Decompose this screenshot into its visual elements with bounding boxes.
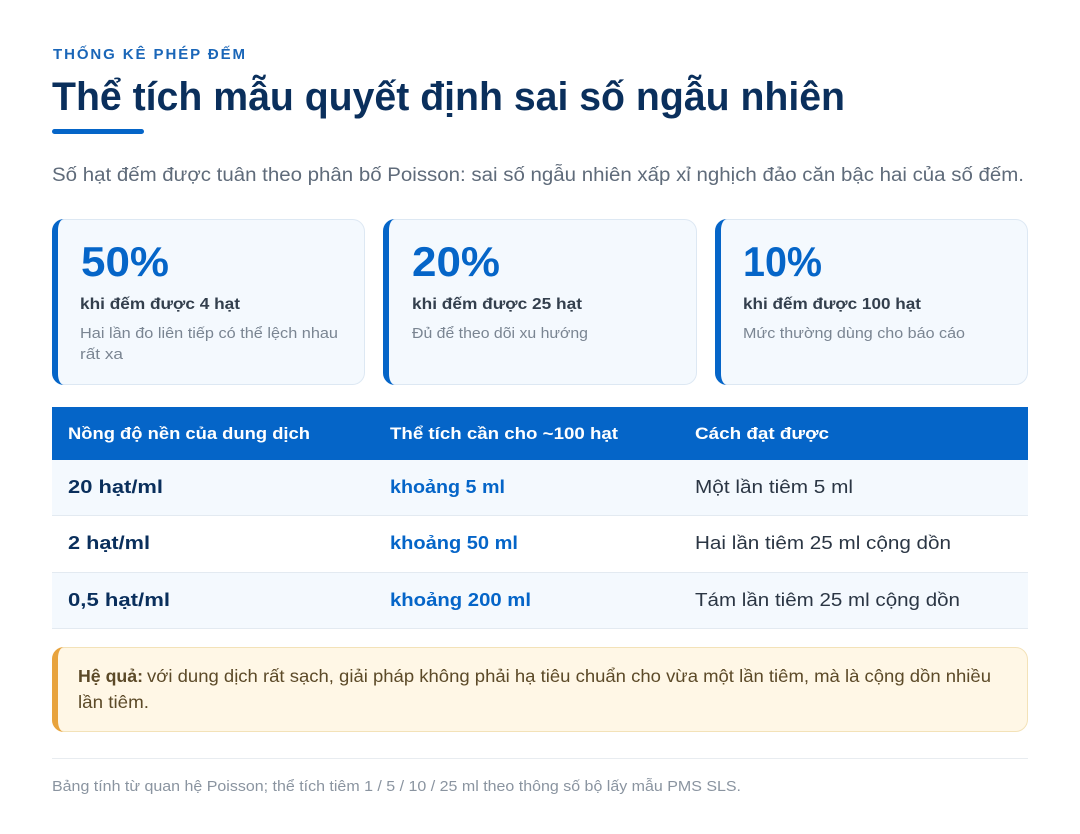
- callout: consequence: [52, 647, 1028, 732]
- stat note: Hai lần đo liên tiếp có thể lệch nhau: [80, 326, 338, 342]
- kicker: THỐNG KÊ PHÉP ĐẾM: [53, 45, 245, 63]
- stat label: khi đếm được 25 hạt: [412, 296, 583, 313]
- table row: 2 hạt/ml: [52, 516, 1028, 573]
- table header: Thể tích cần cho ~100 hạt: [390, 424, 618, 443]
- footer source note: Bảng tính từ quan hệ Poisson; thể tích tiêm 1 / 5 / 10 / 25 ml theo thông số bộ lấy mẫu PMS SLS.: [52, 778, 741, 795]
- title: Thể tích mẫu quyết định sai số ngẫu nhiên: [52, 73, 845, 119]
- table header: [52, 407, 1028, 460]
- table row: 20 hạt/ml: khoảng 5 ml: [390, 477, 505, 497]
- subtitle: Số hạt đếm được tuân theo phân bố Poisson: sai số ngẫu nhiên xấp xỉ nghịch đảo căn bậc hai của số đếm.: [52, 164, 1024, 186]
- stat value: 50%: [81, 238, 169, 285]
- table row: 2 hạt/ml: khoảng 50 ml: [390, 533, 518, 553]
- stat note: Đủ để theo dõi xu hướng: [412, 326, 588, 342]
- stat value: 20%: [412, 238, 500, 285]
- stat note: Mức thường dùng cho báo cáo: [743, 326, 965, 342]
- table row: 0,5 hạt/ml: 0,5 hạt/ml: [68, 590, 170, 610]
- panel: stat card 20%: [383, 219, 696, 385]
- table row: 20 hạt/ml: Một lần tiêm 5 ml: [695, 477, 853, 497]
- title accent bar: [52, 129, 144, 134]
- stat note: [80, 326, 338, 363]
- table header: Nồng độ nền của dung dịch: [68, 424, 310, 443]
- stat label: khi đếm được 4 hạt: [80, 296, 241, 313]
- panel: stat card 10%: [715, 219, 1028, 385]
- callout text: Hệ quả:: [78, 666, 143, 686]
- panel: stat card 50%: [52, 219, 364, 385]
- stat value: 10%: [743, 238, 822, 285]
- callout text: lần tiêm.: [78, 692, 149, 712]
- stat label: khi đếm được 100 hạt: [743, 296, 922, 313]
- callout text: [78, 666, 991, 712]
- panel: volume table: [52, 407, 1028, 629]
- table row: 20 hạt/ml: 20 hạt/ml: [68, 477, 163, 497]
- table row: 0,5 hạt/ml: Tám lần tiêm 25 ml cộng dồn: [695, 590, 960, 610]
- callout text: với dung dịch rất sạch, giải pháp không phải hạ tiêu chuẩn cho vừa một lần tiêm, mà là cộng dồn nhiều: [147, 666, 991, 686]
- table row: 2 hạt/ml: 2 hạt/ml: [68, 533, 150, 553]
- table row: 0,5 hạt/ml: [52, 573, 1028, 629]
- table header: Cách đạt được: [695, 424, 829, 443]
- table row: 0,5 hạt/ml: khoảng 200 ml: [390, 590, 531, 610]
- table row: 2 hạt/ml: Hai lần tiêm 25 ml cộng dồn: [695, 533, 951, 553]
- table row: 20 hạt/ml: [52, 460, 1028, 516]
- stat note: rất xa: [80, 347, 124, 363]
